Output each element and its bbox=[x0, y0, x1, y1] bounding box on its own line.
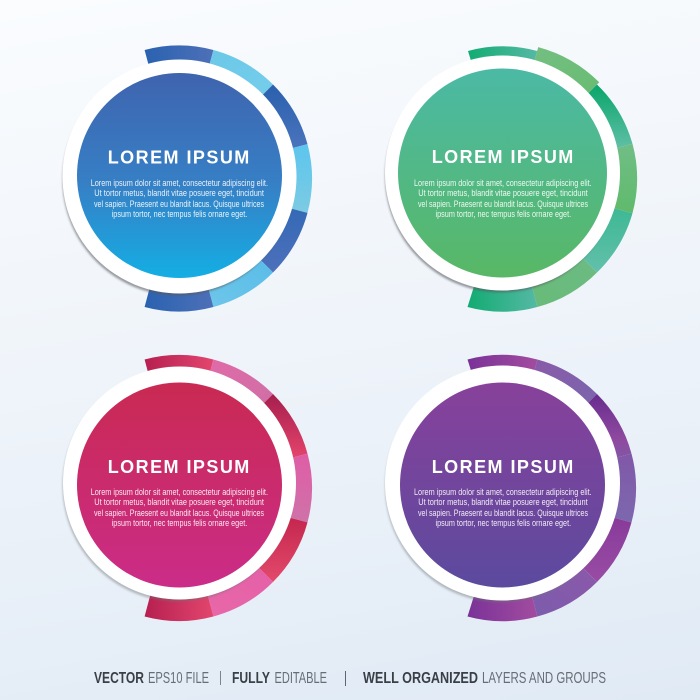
green body text: Lorem ipsum dolor sit amet, consectetur adipiscing elit. bbox=[414, 178, 592, 189]
panel: purple circle bbox=[385, 355, 636, 621]
pink segmented ring bbox=[145, 355, 312, 621]
green body text bbox=[414, 178, 592, 220]
green body text: ipsum tortor, nec tempus felis ornare eget. bbox=[436, 209, 571, 220]
purple body text: vel sapien. Praesent eu blandit lacus. Quisque ultrices bbox=[418, 508, 588, 519]
blue heading: LOREM IPSUM bbox=[108, 148, 249, 168]
panel: green circle bbox=[385, 46, 637, 312]
pink body text: vel sapien. Praesent eu blandit lacus. Quisque ultrices bbox=[94, 508, 264, 519]
blue body text: ipsum tortor, nec tempus felis ornare eget. bbox=[112, 209, 247, 220]
pink body text: Lorem ipsum dolor sit amet, consectetur adipiscing elit. bbox=[91, 487, 268, 498]
pink gradient disc bbox=[77, 382, 282, 588]
blue circle drop shadow bbox=[62, 64, 294, 296]
purple segmented ring bbox=[468, 355, 636, 621]
footer caption: EPS10 FILE bbox=[148, 670, 209, 687]
pink heading: LOREM IPSUM bbox=[108, 457, 249, 477]
footer caption: FULLY bbox=[232, 670, 271, 687]
footer caption: EDITABLE bbox=[274, 670, 327, 687]
footer caption: VECTOR bbox=[94, 670, 144, 687]
purple heading: LOREM IPSUM bbox=[432, 457, 573, 477]
blue body text: vel sapien. Praesent eu blandit lacus. Quisque ultrices bbox=[94, 199, 264, 210]
blue segmented ring bbox=[145, 45, 312, 312]
pink white disc bbox=[63, 366, 296, 600]
purple gradient disc bbox=[400, 382, 605, 588]
blue body text bbox=[91, 178, 268, 220]
green body text: Ut tortor metus, blandit vitae posuere eget, tincidunt bbox=[418, 188, 588, 199]
footer caption: LAYERS AND GROUPS bbox=[482, 670, 606, 687]
purple body text: ipsum tortor, nec tempus felis ornare eget. bbox=[436, 518, 571, 529]
purple white disc bbox=[385, 366, 620, 600]
footer caption bbox=[94, 670, 606, 687]
blue body text: Lorem ipsum dolor sit amet, consectetur adipiscing elit. bbox=[91, 178, 268, 189]
blue body text: Ut tortor metus, blandit vitae posuere eget, tincidunt bbox=[94, 188, 264, 199]
panel: pink circle bbox=[62, 355, 312, 621]
blue white disc bbox=[62, 60, 296, 294]
green body text: vel sapien. Praesent eu blandit lacus. Quisque ultrices bbox=[418, 199, 588, 210]
green circle drop shadow bbox=[385, 60, 617, 292]
blue gradient disc bbox=[77, 73, 282, 278]
panel: blue circle bbox=[62, 45, 312, 312]
pink circle drop shadow bbox=[62, 370, 294, 602]
purple circle drop shadow bbox=[385, 370, 617, 602]
pink body text: Ut tortor metus, blandit vitae posuere eget, tincidunt bbox=[94, 497, 264, 508]
green heading: LOREM IPSUM bbox=[432, 147, 573, 167]
green gradient disc bbox=[398, 68, 607, 278]
pink body text: ipsum tortor, nec tempus felis ornare eget. bbox=[112, 518, 247, 529]
purple body text bbox=[414, 487, 592, 529]
purple body text: Lorem ipsum dolor sit amet, consectetur adipiscing elit. bbox=[414, 487, 592, 498]
footer caption: WELL ORGANIZED bbox=[363, 670, 478, 687]
purple body text: Ut tortor metus, blandit vitae posuere eget, tincidunt bbox=[418, 497, 588, 508]
pink body text bbox=[91, 487, 268, 529]
green white disc bbox=[385, 56, 620, 290]
green segmented ring bbox=[468, 46, 637, 312]
